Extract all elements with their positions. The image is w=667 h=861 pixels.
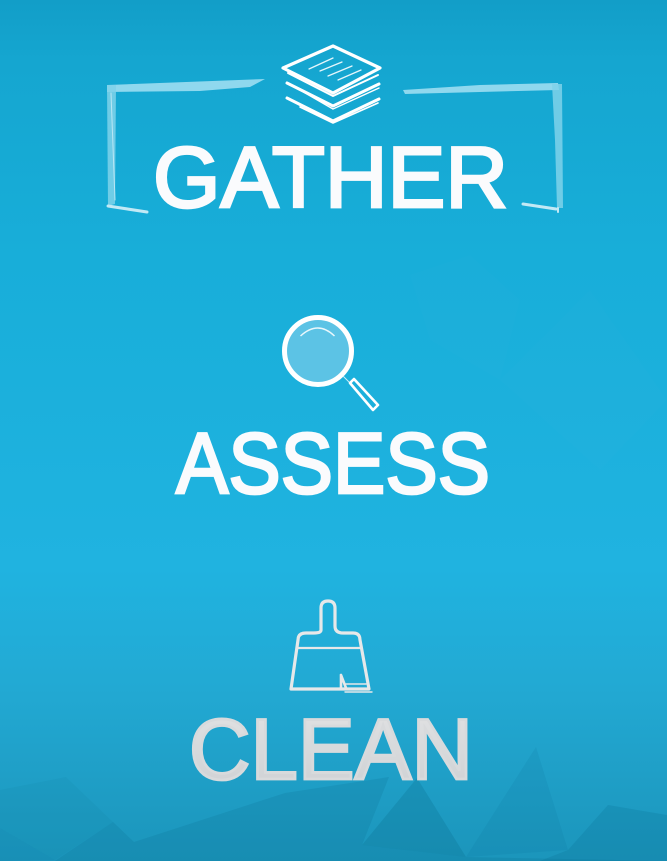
icon: magnifying glass [284,318,378,410]
icon: brush [291,601,372,692]
icon: stack of papers [283,46,380,123]
heading: ASSESS: ASSESS [176,416,490,512]
heading: GATHER: GATHER [153,130,508,226]
heading: CLEAN: CLEAN [189,702,473,798]
frame: Gather brush bracket [107,79,563,212]
